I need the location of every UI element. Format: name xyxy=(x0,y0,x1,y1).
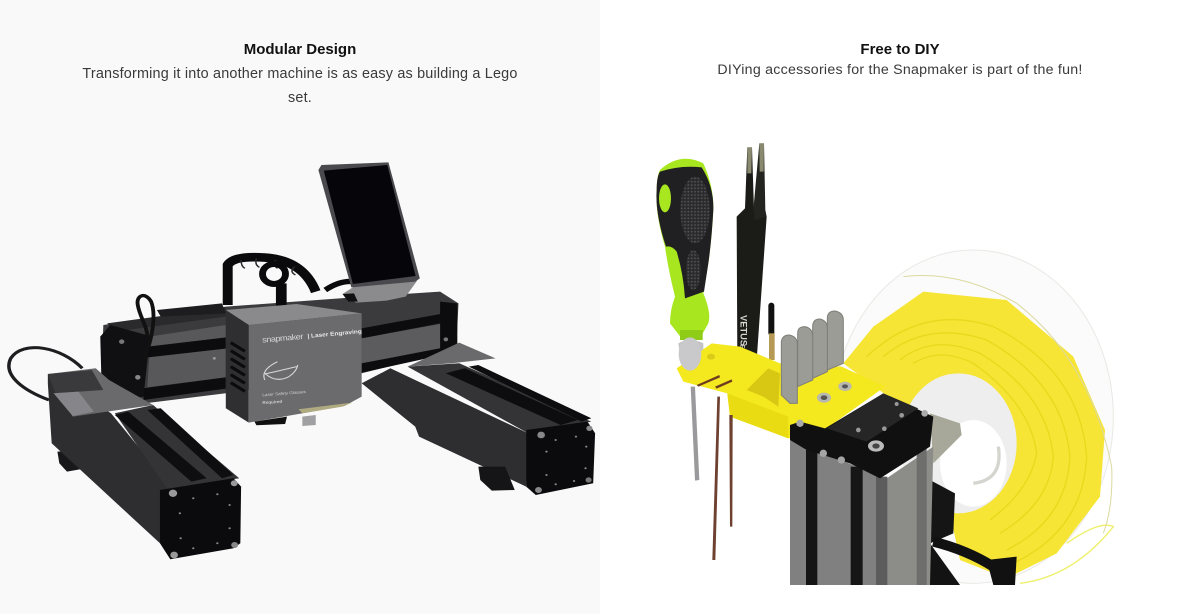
icon: hex pin xyxy=(768,303,775,360)
text: modular design description: Transforming it into another machine is as easy as building a Lego set. xyxy=(82,66,518,106)
text: free to DIY description: DIYing accessories for the Snapmaker is part of the fun! xyxy=(717,62,1083,78)
icon: tweezers xyxy=(737,143,767,360)
heading: modular design: Modular Design xyxy=(244,41,356,58)
heading: free to DIY: Free to DIY xyxy=(860,41,940,58)
panel: modular design xyxy=(0,0,600,614)
illustration: snapmaker laser engraving machine xyxy=(9,162,595,559)
text: tweezers brand: VETUS xyxy=(739,315,749,346)
text: safety notice required: Required xyxy=(262,399,283,405)
panel: free to DIY xyxy=(600,0,1200,614)
icon: filament spool xyxy=(833,250,1113,583)
icon: holder bolts xyxy=(817,382,852,403)
icon: right front rail xyxy=(362,343,595,495)
icon: touch screen xyxy=(318,162,420,303)
illustration: DIY tool holder and filament xyxy=(656,143,1113,585)
icon: screwdriver xyxy=(656,159,713,481)
icon: rear rail xyxy=(100,292,458,403)
icon: left front rail xyxy=(48,368,241,559)
icon: cable loop xyxy=(138,296,153,367)
icon: laser module xyxy=(226,304,362,426)
icon: power cable xyxy=(9,348,82,400)
text: brand label: snapmaker xyxy=(262,331,304,344)
text: module label: | Laser Engraving xyxy=(307,328,362,340)
icon: cable drag chain xyxy=(228,257,354,310)
icon: printed yellow holder xyxy=(677,337,885,560)
text: safety notice: Laser Safety Glasses xyxy=(262,389,306,397)
text: tweezers model: ESD xyxy=(739,344,745,357)
icon: safety glasses xyxy=(264,362,298,380)
icon: gray printed fins xyxy=(781,311,843,403)
icon: linear module column xyxy=(790,393,1017,585)
